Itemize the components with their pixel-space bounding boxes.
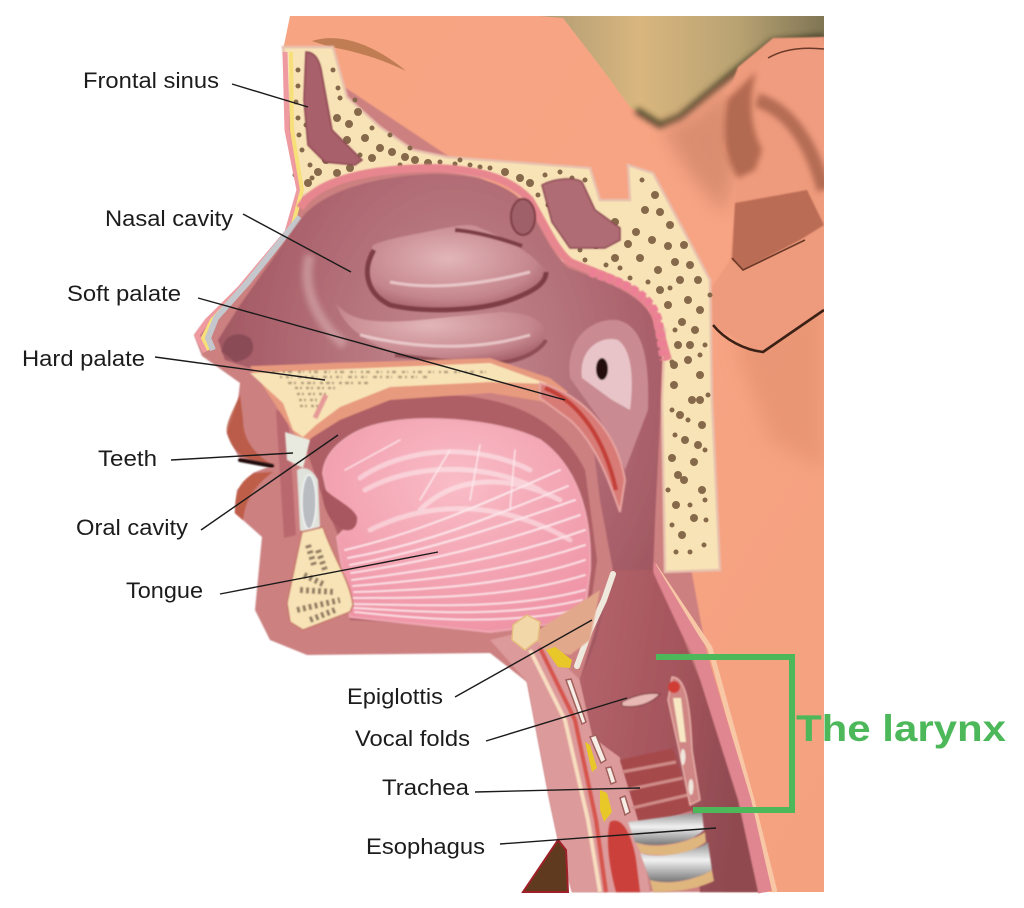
mucosa bbox=[250, 358, 568, 445]
antihelix dark band bbox=[757, 100, 824, 190]
epiglottis cartilage bbox=[577, 574, 613, 666]
soft palate bbox=[540, 383, 625, 512]
gland lower bbox=[600, 790, 612, 822]
forehead and nose layers bbox=[197, 52, 302, 352]
concha bbox=[732, 190, 824, 270]
incisive canal bbox=[315, 395, 326, 418]
speckle column bbox=[295, 388, 335, 406]
yellow glands bbox=[546, 647, 612, 822]
lobe outline bbox=[713, 310, 824, 352]
frontal sinus cavity bbox=[304, 52, 362, 165]
outer arch bbox=[569, 320, 648, 470]
tongue notch bbox=[322, 487, 357, 530]
eustachian opening bbox=[569, 320, 648, 470]
ring highlights bbox=[622, 762, 688, 808]
bone: skull and spine bbox=[283, 47, 720, 572]
red arytenoid dot bbox=[668, 681, 680, 693]
cream line bbox=[530, 650, 600, 892]
speckle row three bbox=[288, 382, 370, 384]
teeth bbox=[285, 432, 320, 535]
opening bbox=[596, 358, 608, 380]
pill two bbox=[590, 735, 606, 763]
eyebrow bbox=[312, 38, 406, 71]
grey cartilage bbox=[208, 217, 300, 350]
palate bone bbox=[250, 363, 548, 437]
helix fold shadow bbox=[724, 72, 762, 178]
pill four bbox=[620, 796, 630, 815]
label: tongue: Tongue bbox=[126, 578, 203, 603]
mandible bbox=[287, 527, 353, 630]
trachea tube bbox=[620, 748, 692, 825]
bone marrow speckle bbox=[272, 372, 490, 406]
soft palate muscle bbox=[545, 388, 616, 490]
line: nasal cavity bbox=[243, 214, 351, 272]
anterior cartilage pills bbox=[566, 679, 630, 815]
line: hard palate bbox=[155, 357, 325, 380]
cervical vertebrae bbox=[608, 812, 714, 892]
hyoid muscle bbox=[530, 590, 600, 655]
label: frontal sinus: Frontal sinus bbox=[83, 68, 219, 93]
small ring one bbox=[680, 749, 686, 765]
disc two bbox=[640, 842, 712, 882]
line: esophagus bbox=[500, 828, 716, 844]
superior fold bbox=[455, 230, 522, 246]
skin shadow in front of ear bbox=[662, 85, 735, 215]
line: teeth bbox=[171, 453, 293, 460]
concha body bbox=[335, 300, 545, 363]
red line bbox=[540, 648, 606, 892]
small ring two bbox=[688, 779, 694, 795]
cricoid and posterior cartilage bbox=[668, 677, 700, 805]
labels bbox=[22, 68, 485, 859]
cream edge bbox=[654, 565, 775, 892]
tracheal rings bbox=[620, 748, 692, 825]
large spots bbox=[308, 112, 702, 535]
label: hard palate: Hard palate bbox=[22, 346, 145, 371]
inner arch bbox=[582, 339, 632, 410]
concha body bbox=[367, 225, 546, 309]
skin shadow below ear bbox=[742, 316, 822, 458]
label: trachea: Trachea bbox=[382, 775, 470, 800]
ear bbox=[712, 37, 824, 352]
upper lip bbox=[227, 395, 273, 465]
speckle row one bbox=[272, 371, 490, 373]
lower nasal concha bbox=[335, 300, 546, 364]
concha outline bbox=[732, 240, 805, 270]
posterior capsule bbox=[668, 677, 700, 805]
disc one bbox=[628, 812, 704, 845]
chest bbox=[523, 840, 568, 892]
upper tooth bbox=[285, 432, 310, 468]
label: teeth: Teeth bbox=[98, 446, 157, 471]
concha highlight bbox=[360, 335, 530, 346]
skin background bbox=[283, 16, 824, 892]
speckle row two bbox=[280, 376, 430, 378]
bone spots bbox=[295, 70, 710, 552]
nostril bbox=[222, 334, 253, 362]
heading: the larynx: The larynx bbox=[796, 708, 1006, 749]
pink membrane around nasal roof bbox=[300, 168, 668, 360]
lower tooth bbox=[297, 468, 320, 535]
hair bbox=[540, 16, 824, 125]
antihelix light area bbox=[757, 47, 824, 180]
label: soft palate: Soft palate bbox=[67, 281, 181, 306]
line: epiglottis bbox=[455, 620, 592, 697]
bracket: the larynx bbox=[656, 657, 792, 810]
neck stripes bbox=[530, 648, 606, 892]
lip inner slot bbox=[276, 410, 296, 538]
line: frontal sinus bbox=[232, 84, 308, 107]
vocal folds bbox=[622, 693, 660, 707]
lower lip bbox=[235, 472, 273, 520]
gland upper bbox=[546, 647, 572, 668]
hair mass bbox=[540, 16, 824, 125]
line: tongue bbox=[220, 552, 438, 594]
cream cartilage bbox=[673, 698, 686, 742]
marrow oval bbox=[608, 821, 640, 892]
tan band two bbox=[650, 870, 714, 892]
hyoid bone bbox=[512, 615, 540, 650]
upper nasal conchae bbox=[367, 199, 546, 310]
oral cavity band bbox=[305, 395, 597, 630]
pill one bbox=[566, 679, 586, 724]
hair dark lower edge bbox=[636, 37, 824, 125]
airway of the larynx and esophagus bbox=[580, 570, 758, 892]
tan band one bbox=[636, 832, 706, 855]
lower tooth pulp bbox=[302, 475, 316, 529]
label: oral cavity: Oral cavity bbox=[76, 515, 188, 540]
gland middle bbox=[585, 742, 597, 772]
ear outer shape bbox=[712, 37, 824, 352]
yellow fat layer bbox=[203, 52, 302, 350]
label: esophagus: Esophagus bbox=[366, 834, 485, 859]
hard palate bbox=[250, 358, 568, 445]
jaw marrow bbox=[297, 545, 340, 620]
jaw bone bbox=[287, 527, 353, 630]
pink stripe bbox=[648, 565, 765, 892]
outer skin layer bbox=[197, 52, 299, 352]
front neck tissue bbox=[490, 630, 650, 892]
line: soft palate bbox=[198, 298, 565, 400]
line: vocal folds bbox=[486, 698, 627, 741]
helix top outline bbox=[768, 48, 824, 58]
concha highlights bbox=[390, 272, 530, 286]
pill three bbox=[606, 767, 616, 784]
nasal front highlight bbox=[307, 255, 345, 345]
concha dark outline bbox=[367, 250, 546, 310]
label: epiglottis: Epiglottis bbox=[347, 684, 443, 709]
tongue fibres bbox=[345, 440, 585, 620]
line: trachea bbox=[475, 788, 640, 792]
turbinate curl bbox=[511, 199, 535, 235]
line: oral cavity bbox=[201, 435, 338, 530]
shadow under concha bbox=[395, 340, 546, 364]
sphenoid sinus cavity bbox=[542, 179, 620, 248]
label: vocal folds: Vocal folds bbox=[355, 726, 470, 751]
nasal cavity and pharynx bbox=[218, 174, 692, 825]
small spots bbox=[295, 70, 710, 552]
neck back pink stripe bbox=[648, 565, 775, 892]
label: nasal cavity: Nasal cavity bbox=[105, 206, 233, 231]
sagittal section: base tissue bbox=[194, 47, 767, 892]
tongue bbox=[323, 419, 590, 632]
mouth line bbox=[240, 460, 272, 466]
pink adenoid tissue bbox=[590, 272, 664, 360]
leader lines bbox=[155, 84, 716, 844]
